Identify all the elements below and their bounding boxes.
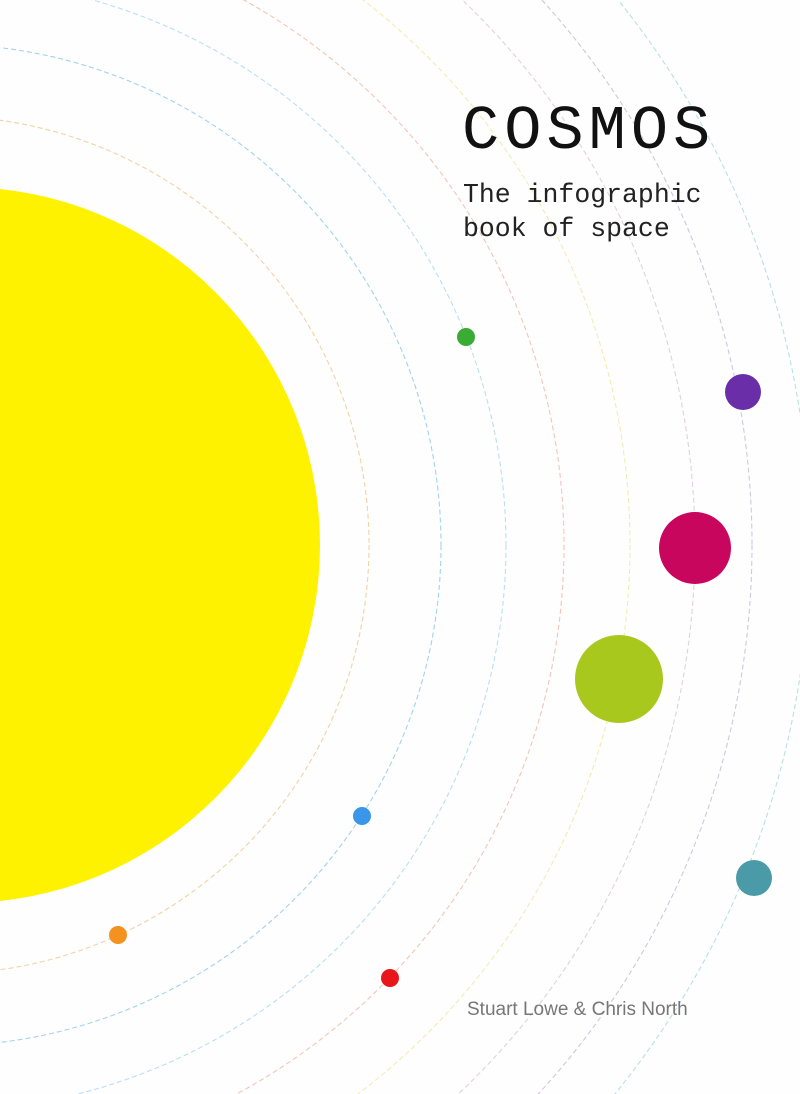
planet: earth (381, 969, 399, 987)
planet: mercury (109, 926, 127, 944)
planet: jupiter (575, 635, 663, 723)
planet: uranus (725, 374, 761, 410)
planet: mars (457, 328, 475, 346)
planet: venus (353, 807, 371, 825)
authors: Stuart Lowe & Chris North (467, 999, 688, 1020)
title: COSMOS (462, 96, 715, 167)
planet: saturn (659, 512, 731, 584)
planet: neptune (736, 860, 772, 896)
subtitle: The infographic (463, 180, 702, 210)
sun (0, 187, 320, 903)
subtitle: book of space (463, 214, 670, 244)
subtitle (463, 180, 702, 244)
